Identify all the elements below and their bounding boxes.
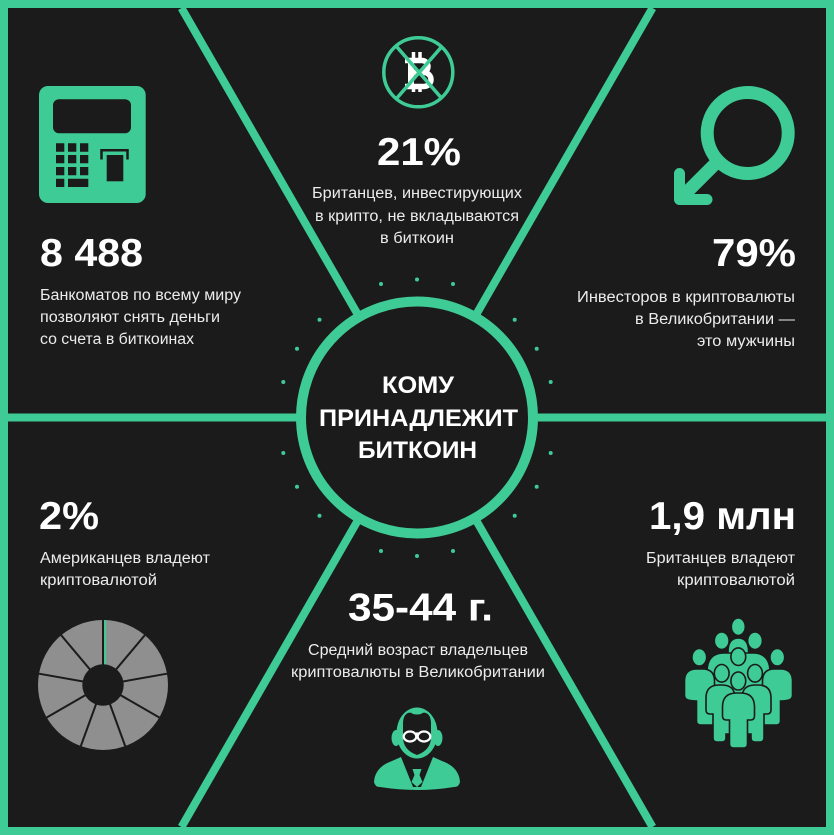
title: КОМУ bbox=[382, 372, 455, 399]
stat: 79%: Инвесторов в криптовалюты bbox=[577, 289, 795, 306]
icon: crossed-out bitcoin bbox=[384, 38, 453, 107]
stat: 2%: криптовалютой bbox=[40, 572, 157, 589]
title: БИТКОИН bbox=[358, 437, 477, 464]
icon: ATM bbox=[39, 86, 146, 203]
icon: man with glasses bbox=[374, 708, 460, 790]
icon: male symbol bbox=[680, 92, 788, 200]
stat: 1,9 млн bbox=[646, 495, 796, 589]
stat: 35-44 г. bbox=[291, 586, 545, 681]
stat: 79%: это мужчины bbox=[697, 333, 795, 350]
stat: 2% bbox=[39, 495, 210, 589]
stat: 21%: в крипто, не вкладываются bbox=[315, 208, 519, 225]
stat: 79%: 79% bbox=[712, 232, 796, 275]
stat: 21% bbox=[312, 131, 522, 247]
stat: 1,9 млн: 1,9 млн bbox=[649, 495, 796, 538]
stat: 1,9 млн: Британцев владеют bbox=[646, 550, 795, 567]
icon: crowd of people bbox=[684, 618, 792, 748]
stat: 1,9 млн: криптовалютой bbox=[677, 572, 795, 589]
stat: 35-44 г.: Средний возраст владельцев bbox=[308, 642, 528, 659]
stat: 79%: в Великобритании — bbox=[635, 311, 796, 328]
chart: 2% donut bbox=[38, 620, 168, 750]
stat: 8 488: 8 488 bbox=[40, 232, 143, 275]
stat: 35-44 г.: 35-44 г. bbox=[348, 586, 493, 630]
stat: 8 488: со счета в биткоинах bbox=[40, 331, 194, 348]
stat: 35-44 г.: криптовалюты в Великобритании bbox=[291, 664, 545, 681]
stat: 2%: 2% bbox=[39, 495, 99, 538]
center circle bbox=[301, 302, 533, 534]
dots around center bbox=[281, 278, 553, 558]
title: ПРИНАДЛЕЖИТ bbox=[319, 405, 518, 432]
stat: 79% bbox=[577, 232, 796, 350]
stat: 8 488: Банкоматов по всему миру bbox=[40, 287, 241, 304]
stat: 21%: Британцев, инвестирующих bbox=[312, 185, 522, 202]
stat: 21%: в биткоин bbox=[380, 230, 454, 247]
stat: 8 488 bbox=[40, 232, 241, 348]
title bbox=[319, 372, 518, 464]
stat: 21%: 21% bbox=[377, 131, 461, 174]
stat: 8 488: позволяют снять деньги bbox=[40, 309, 220, 326]
stat: 2%: Американцев владеют bbox=[40, 550, 210, 567]
